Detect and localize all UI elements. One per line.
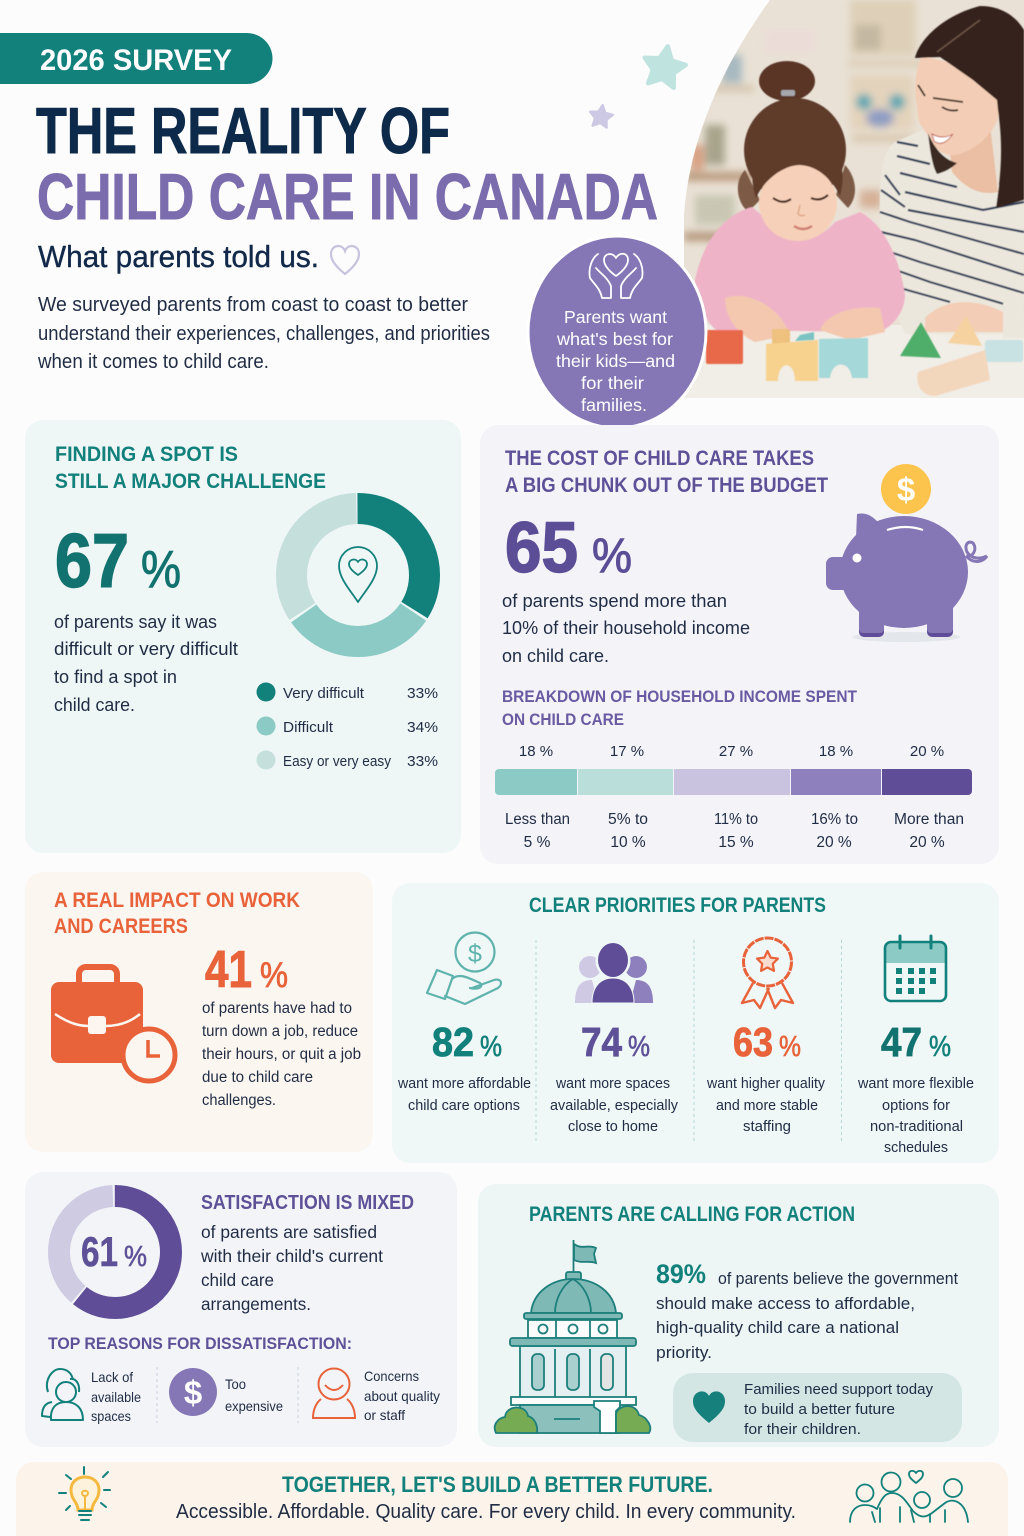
priority: affordable: child care options [408,1098,520,1114]
text block [502,590,750,666]
priority: flexible: 47 [881,1019,922,1065]
icon: teal star [640,43,688,89]
text block: 10% of their household income [502,617,750,638]
intro paragraph: understand their experiences, challenges, and priorities [38,323,490,345]
stat: 41%: % [260,956,288,995]
stat: 65%: 65 [505,509,578,588]
heading [54,889,300,938]
text block: turn down a job, reduce [202,1023,358,1040]
reason: too expensive: $ [184,1374,202,1411]
donut chart [292,508,424,642]
icon: piggy bank: $ [897,471,915,508]
donut chart: 61% [59,1196,171,1308]
reason: lack of spaces: Lack of [91,1369,133,1385]
closing message [176,1472,796,1523]
subtitle: What parents told us. [38,239,319,274]
heading [505,447,828,497]
priority: quality: and more stable [716,1098,818,1114]
panel: clear priorities [392,883,999,1163]
survey tag: 2026 SURVEY [40,44,232,77]
text block: arrangements. [201,1294,311,1314]
stat: 89% and text: priority. [656,1343,712,1362]
priority: quality [706,938,826,1135]
donut chart: 61%: % [124,1241,147,1273]
stacked bar chart: More than [894,811,964,828]
callout: parents want what's best: for their [581,373,644,393]
stat: 89% and text [656,1259,958,1362]
text block: to find a spot in [54,666,177,687]
priority: flexible: want more flexible [857,1076,974,1092]
text block: due to child care [202,1069,313,1086]
stacked bar chart [495,743,972,851]
callout: parents want what's best [528,236,706,428]
stat: 65%: % [592,530,632,583]
callout: families need support [673,1373,962,1442]
stacked bar chart: 11% to [714,811,758,828]
callout: parents want what's best: what's best for [556,329,673,349]
stacked bar chart: 20 % [816,834,852,851]
heading: A REAL IMPACT ON WORK [54,889,300,912]
priority: spaces [550,943,679,1135]
priority: quality: 63 [733,1019,773,1065]
text block: their hours, or quit a job [202,1046,361,1063]
reason: quality concerns: Concerns [364,1368,419,1384]
stacked bar chart: 20 % [910,743,944,760]
text block [202,1000,361,1109]
text block: child care. [54,694,135,715]
mother face [915,56,1000,155]
panel: impact on work [25,872,373,1152]
stacked bar chart: 5% to [608,811,648,828]
text block: child care [201,1270,274,1290]
mother sweater [880,130,1024,334]
panel: satisfaction [25,1172,457,1447]
text block: challenges. [202,1092,276,1109]
icon: family [850,1471,968,1522]
priority: affordable: 82 [432,1019,474,1065]
stacked bar chart: Less than [505,811,570,828]
stat: 89% and text: 89% [656,1259,706,1289]
subheading: breakdown: BREAKDOWN OF HOUSEHOLD INCOME SPENT [502,687,858,706]
heading: SATISFACTION IS MIXED [201,1192,414,1214]
reason: lack of spaces [42,1369,141,1424]
text block: of parents say it was [54,611,217,632]
legend [256,682,438,770]
stacked bar chart: 18 % [819,743,853,760]
heading: STILL A MAJOR CHALLENGE [55,470,326,493]
legend: Difficult [283,719,334,736]
priority: flexible: schedules [884,1140,948,1156]
priority: affordable: $ [468,940,482,968]
icon: calendar [884,936,947,1001]
subheading: top reasons: TOP REASONS FOR DISSATISFACTION: [48,1334,352,1353]
text block: of parents have had to [202,1000,352,1017]
stacked bar chart: 27 % [719,743,753,760]
callout: families need support: for their children. [744,1421,861,1438]
priority: spaces: available, especially [550,1098,679,1114]
reason: too expensive: expensive [225,1398,283,1414]
panel: cost of child care [480,425,999,864]
icon: person outline [313,1368,355,1418]
priority: flexible: % [929,1031,951,1063]
heading: A BIG CHUNK OUT OF THE BUDGET [505,474,828,497]
priority: spaces: 74 [581,1019,622,1065]
subheading: breakdown [502,687,858,729]
stat: 89% and text: high-quality child care a national [656,1318,899,1337]
heading: THE COST OF CHILD CARE TAKES [505,447,814,470]
donut chart: 61%: 61 [81,1228,118,1275]
stat: 67%: % [141,541,181,599]
priority: spaces: want more spaces [555,1076,670,1092]
icon: location pin with heart [339,547,377,602]
text block: of parents spend more than [502,590,727,611]
child [759,61,815,101]
heading: PARENTS ARE CALLING FOR ACTION [529,1203,855,1226]
icon: light bulb [59,1467,110,1520]
closing message: TOGETHER, LET'S BUILD A BETTER FUTURE. [282,1472,713,1497]
stat: 89% and text: should make access to affordable, [656,1294,915,1313]
icon: award rosette [742,938,793,1008]
stacked bar chart: 16% to [811,811,858,828]
heading: CLEAR PRIORITIES FOR PARENTS [529,894,826,917]
callout: families need support: Families need support today [744,1381,934,1398]
icon: piggy bank [826,464,987,642]
text block: of parents are satisfied [201,1222,377,1242]
reason: too expensive [169,1368,283,1416]
heading: FINDING A SPOT IS [55,443,238,466]
priority: affordable: % [480,1031,502,1063]
icon: hands holding heart [589,254,643,298]
stacked bar chart: 20 % [909,834,945,851]
legend: 33% [407,753,438,770]
priority: flexible [857,936,974,1156]
intro paragraph [37,294,490,373]
icon: heart outline [331,246,359,274]
icon: group of people [575,943,653,1003]
legend: 33% [407,685,438,702]
icon: hand and coin [427,932,501,1004]
reason: lack of spaces: available [91,1389,141,1405]
text block [54,611,238,715]
reason: quality concerns [313,1368,440,1423]
stat: 41%: 41 [205,941,252,999]
stacked bar chart: 10 % [610,834,646,851]
table [684,325,1024,400]
callout: parents want what's best: Parents want [564,307,667,327]
closing message: Accessible. Affordable. Quality care. For every child. In every community. [176,1501,796,1523]
legend: Easy or very easy [283,753,391,770]
priority: spaces: % [628,1031,650,1063]
footer banner [16,1462,1008,1536]
priority: affordable [397,932,531,1114]
intro paragraph: We surveyed parents from coast to coast to better [38,294,468,316]
text block [200,1222,383,1314]
icon: people outline [42,1369,83,1420]
stat: 67%: 67 [55,519,129,604]
reason: too expensive: Too [225,1376,246,1392]
callout: families need support: to build a better future [744,1401,895,1418]
panel: call for action [478,1184,999,1447]
priority: spaces: close to home [568,1119,658,1135]
icon: government building [495,1240,650,1433]
text block: on child care. [502,645,609,666]
priority: flexible: options for [882,1098,950,1114]
intro paragraph: when it comes to child care. [37,351,269,373]
title [36,94,658,233]
icon: purple star [588,104,614,128]
reason: lack of spaces: spaces [91,1408,131,1424]
stacked bar chart: 15 % [718,834,754,851]
reason: quality concerns: or staff [364,1407,405,1423]
priority: quality: want higher quality [706,1076,826,1092]
icon: briefcase with clock [51,967,175,1081]
heading [55,443,326,493]
text block: difficult or very difficult [54,638,238,659]
survey tag [0,33,272,84]
photo: child and mother playing with blocks [680,0,1024,400]
reason: quality concerns: about quality [364,1388,440,1404]
stat: 41% [205,941,288,999]
blocks [706,330,743,364]
stacked bar chart: 18 % [519,743,553,760]
mother neck [950,125,998,193]
legend: Very difficult [283,685,365,702]
priority: flexible: non-traditional [870,1119,963,1135]
stacked bar chart: 17 % [610,743,644,760]
mother hair [915,6,1024,208]
stacked bar chart: 5 % [524,834,551,851]
title: CHILD CARE IN CANADA [37,160,658,233]
icon: heart [693,1391,725,1423]
legend: 34% [407,719,438,736]
mother hand [925,302,1003,332]
priority: affordable: want more affordable [397,1076,531,1092]
callout: parents want what's best: families. [581,395,647,415]
stat: 89% and text: of parents believe the government [718,1269,958,1288]
text block: with their child's current [200,1246,383,1266]
stat: 67% [55,519,181,604]
panel: finding a spot [25,420,461,853]
priority: quality: % [779,1031,801,1063]
subheading: breakdown: ON CHILD CARE [502,710,624,729]
heading: AND CAREERS [54,915,188,938]
priority: quality: staffing [743,1119,791,1135]
callout: parents want what's best: their kids—and [556,351,675,371]
stat: 65% [505,509,632,588]
title: THE REALITY OF [36,94,450,167]
